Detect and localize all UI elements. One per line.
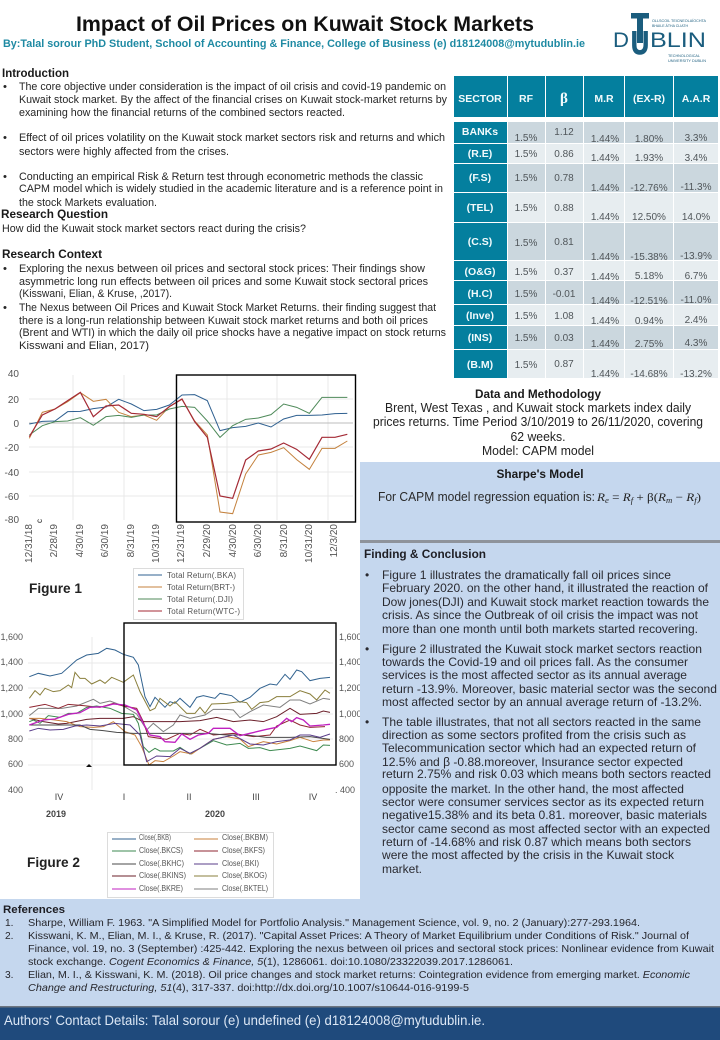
chart: figure 2 line chart: 1,200 <box>0 683 23 693</box>
legend: figure 2: Close(.BKHC) <box>139 859 184 868</box>
findings bullet 3: return 2.75% and risk 0.03 which means both sectors reacted <box>382 767 711 781</box>
panel: data and methodology: 62 weeks. <box>510 430 566 444</box>
legend: figure 2: Close(.BKINS) <box>139 871 186 880</box>
table header: RF <box>519 93 534 105</box>
row: real estate: 1.5% <box>515 149 538 160</box>
panel: introduction: Introduction <box>2 66 69 80</box>
row: health care: 1.44% <box>591 296 619 307</box>
panel: research context: Research Context <box>2 247 102 261</box>
row: real estate: 3.4% <box>685 153 708 164</box>
findings bullet 2: most affected sector by an annual average return of -13.2%. <box>382 695 702 709</box>
row: oil and gas: 5.18% <box>635 271 663 282</box>
panel: introduction: examining how the financial returns of the combined sectors reacted. <box>19 107 345 119</box>
chart: figure 2 line chart: 400 <box>8 785 23 795</box>
chart: figure 1 line chart: c <box>35 519 44 523</box>
row: basic materials: (B.M) <box>467 359 493 371</box>
row: consumer services: 0.81 <box>554 237 574 248</box>
chart: figure 1 line chart: 12/31/18 <box>24 524 35 563</box>
panel: references: stock exchange. Cogent Economics & Finance, 5 (1), 1286061. doi:10.1080/23322039.2017.1286061. <box>28 957 513 968</box>
panel: introduction: The core objective under consideration is the impact of oil crisis and covid-19 pandemic on <box>19 81 446 93</box>
findings bullet 3: Telecommunication sector which had an expected return of <box>382 741 697 755</box>
row: consumer services: -13.9% <box>680 251 712 262</box>
row: consumer services: 1.44% <box>591 252 619 263</box>
row: telecom <box>467 202 710 223</box>
chart: figure 2 line chart: IV <box>309 792 317 802</box>
panel: data and methodology <box>373 387 703 458</box>
chart: figure 1 line chart: 10/31/20 <box>304 524 315 563</box>
panel: introduction: sectors were highly affected from the crises. <box>19 146 229 158</box>
row: telecom: 1.44% <box>591 212 619 223</box>
row: health care: -0.01 <box>553 289 576 300</box>
row: oil and gas: (O&G) <box>465 266 495 278</box>
panel: references: Finance, vol. 19, no. 3 (September) :425-442. Exploring the nexus between oil prices and sectoral stock prices: Nonlinear evidence from Kuwait <box>28 944 714 955</box>
legend: figure 2: Close(.BKCS) <box>139 846 183 855</box>
row: insurance <box>468 332 708 350</box>
row: real estate: 1.93% <box>635 153 663 164</box>
panel: research question <box>1 207 306 235</box>
row: investment: 1.08 <box>554 311 574 322</box>
panel: Sharpe's model: R <box>622 490 631 504</box>
panel: introduction <box>2 66 447 209</box>
panel: research question: Research Question <box>1 207 108 221</box>
title: Impact of Oil Prices on Kuwait Stock Markets <box>76 13 534 36</box>
row: investment: 1.5% <box>515 311 538 322</box>
panel: references: Kisswani, K. M., Elian, M. I., & Kruse, R. (2017). "Capital Asset Prices: A Theory of Market Equilibrium under Conditions of Risk." Journal of <box>28 931 689 942</box>
findings bullet 3 <box>365 715 711 876</box>
legend: figure 2: Close(.BKB) <box>139 833 171 842</box>
row: real estate: 1.44% <box>591 153 619 164</box>
panel: research context: asymmetric long run effects between oil prices and some Kuwait stock sectoral prices <box>19 276 428 288</box>
row: oil and gas <box>465 266 708 283</box>
row: investment: (Inve) <box>466 310 494 322</box>
findings bullet 1: • <box>365 568 369 582</box>
row: insurance: 4.3% <box>685 338 708 349</box>
legend: figure 2: Close(.BKRE) <box>139 884 183 893</box>
icon: TU Dublin logo: BLIN <box>650 29 706 52</box>
legend: figure 1 <box>134 568 244 620</box>
panel: research context: • <box>3 263 7 275</box>
footer: contact details <box>0 1006 720 1040</box>
panel: references: Elian, M. I., & Kisswani, K. M. (2018). Oil price changes and stock market returns: Cointegration evidence from emerging market. Economic <box>28 970 690 981</box>
row: telecom: 12.50% <box>632 212 666 223</box>
findings bullet 3: • <box>365 715 369 729</box>
panel: introduction: CAPM model which is widely studied in the academic literature and is a reference point in <box>19 183 443 195</box>
chart: figure 1 line chart: 40 <box>8 369 19 380</box>
panel: Sharpe's model: R <box>685 490 695 504</box>
row: investment: 1.44% <box>591 316 619 327</box>
panel: research context: Exploring the nexus between oil prices and sectoral stock prices: Their findings show <box>19 263 426 275</box>
panel: research context: (Brent and WTI) in which the daily oil price shocks have a negative impact on stock returns <box>19 327 446 339</box>
chart: figure 2 line chart: 1,000 <box>339 709 362 719</box>
panel: research context: The Nexus between Oil Prices and Kuwait Stock Market Returns. their finding suggest that <box>19 302 437 314</box>
row: basic materials: 1.5% <box>515 360 538 371</box>
row: financial services <box>469 172 712 194</box>
findings bullet 2: towards the Covid-19 and oil prices fall. As the consumer <box>382 655 688 669</box>
icon: TU Dublin logo: OLLSCOIL TEICNEOLAÍOCHTA <box>652 19 707 23</box>
row: banks <box>462 126 708 145</box>
chart: figure 2 line chart: 1,400 <box>339 657 362 667</box>
table: sector results <box>454 76 718 380</box>
findings bullet 2: • <box>365 642 369 656</box>
legend: figure 2: Close(.BKTEL) <box>222 884 268 893</box>
row: basic materials <box>467 359 712 380</box>
row: financial services: 1.5% <box>515 173 538 184</box>
chart: figure 1 line chart: 6/30/19 <box>100 524 111 557</box>
row: oil and gas: 6.7% <box>685 271 708 282</box>
panel: finding and conclusion: Finding & Conclusion <box>364 547 486 561</box>
panel: references: References <box>3 904 65 916</box>
findings bullet 1 <box>365 568 709 636</box>
panel: introduction: Kuwait stock market. By the affect of the financial crises on Kuwait stock-market returns by <box>19 94 447 106</box>
row: banks: 3.3% <box>685 133 708 144</box>
panel: Sharpe's model: R <box>596 490 606 504</box>
footer: contact details: Authors' Contact Details: Talal sorour (e) undefined (e) d18124008@mytudublin.ie. <box>4 1012 485 1028</box>
findings bullet 3: market. <box>382 862 422 876</box>
findings bullet 1: February 2020. on the other hand, it illustrated the reaction of <box>382 581 709 595</box>
row: banks: 1.44% <box>591 134 619 145</box>
label: figure 2: Figure 2 <box>27 854 80 870</box>
panel: introduction: Conducting an empirical Risk & Return test through econometric methods the classic <box>19 171 423 183</box>
panel: references: 1. <box>5 918 14 929</box>
panel: Sharpe's model: f <box>694 496 699 505</box>
panel: findings background <box>360 543 720 900</box>
chart: figure 2 line chart: 1,600 <box>0 632 23 642</box>
chart: figure 2 line chart: III <box>252 792 260 802</box>
row: banks: 1.80% <box>635 134 663 145</box>
row: investment: 2.4% <box>685 315 708 326</box>
findings bullet 2: Figure 2 illustrated the Kuwait stock market sectors reaction <box>382 642 702 656</box>
panel: Sharpe's model <box>360 462 720 543</box>
chart: figure 1 line chart: 6/30/20 <box>253 524 264 557</box>
row: insurance: 2.75% <box>635 339 663 350</box>
panel: references: 3. <box>5 970 14 981</box>
findings bullet 3: return of -14.68% and risk 0.87 which means both sectors <box>382 835 691 849</box>
row: consumer services <box>468 236 712 263</box>
chart: figure 2 line chart: 1,600 <box>339 632 362 642</box>
panel: finding and conclusion <box>364 547 717 876</box>
chart: figure 1 line chart: 12/31/19 <box>176 524 187 563</box>
row: real estate: 0.86 <box>554 149 574 160</box>
row: real estate: (R.E) <box>468 148 492 160</box>
legend: figure 2 <box>108 832 274 898</box>
row: insurance: 0.03 <box>554 333 574 344</box>
row: banks: 1.12 <box>554 127 574 138</box>
chart: figure 1 line chart: 20 <box>8 395 19 406</box>
panel: Sharpe's model: = <box>609 490 623 504</box>
panel: references: Change and Restructuring, 51 (4), 317-337. doi:http://dx.doi.org/10.1007/s10644-016-9199-5 <box>28 983 469 994</box>
panel: research context: there is a long-run relationship between Kuwait stock market returns and both oil prices <box>19 315 428 327</box>
chart: figure 1 line chart: 8/31/20 <box>279 524 290 557</box>
row backgrounds <box>454 122 718 378</box>
row: financial services: -11.3% <box>681 182 712 193</box>
row: consumer services: 1.5% <box>515 238 538 249</box>
findings bullet 3: sector came second as most affected sector with an expected <box>382 822 710 836</box>
row: basic materials: -14.68% <box>630 369 668 380</box>
chart: figure 1 line chart: -40 <box>5 468 19 479</box>
chart: figure 2 line chart <box>0 623 362 819</box>
chart: figure 2 line chart: I <box>123 792 125 802</box>
table header: M.R <box>594 93 614 105</box>
row: consumer services: -15.38% <box>630 252 668 263</box>
legend: figure 1: Total Return(WTC-) <box>167 607 240 616</box>
findings bullet 1: Figure 1 illustrates the dramatically fall oil prices since <box>382 568 671 582</box>
row: insurance: (INS) <box>468 332 492 344</box>
chart: figure 1 line chart <box>5 369 356 563</box>
icon: TU Dublin logo: U <box>631 25 649 61</box>
chart: figure 1 line chart: -60 <box>5 492 19 503</box>
row: telecom: 0.88 <box>554 203 574 214</box>
panel: introduction: • <box>3 132 7 144</box>
table header: (EX-R) <box>633 93 665 105</box>
row: health care <box>467 288 712 307</box>
findings bullet 1: more than one month until both markets started recovering. <box>382 622 698 636</box>
chart: figure 1 line chart: 8/31/19 <box>126 524 137 557</box>
icon: TU Dublin logo: TECHNOLOGICAL <box>668 54 700 58</box>
panel: introduction: • <box>3 81 7 93</box>
panel: data and methodology: Data and Methodology <box>475 387 601 401</box>
label: figure 1: Figure 1 <box>29 580 82 596</box>
chart: figure 1 line chart: 4/30/20 <box>228 524 239 557</box>
chart: figure 2 line chart: 800 <box>8 734 23 744</box>
row: financial services: -12.76% <box>630 183 668 194</box>
chart: figure 1 line chart: -80 <box>5 515 19 526</box>
panel: research context: Kisswani and Elian, 2017) <box>19 340 149 352</box>
row: insurance: 1.44% <box>591 339 619 350</box>
icon: TU Dublin logo: BHAILE ÁTHA CLIATH <box>652 24 688 28</box>
row: financial services: (F.S) <box>469 172 491 184</box>
chart: figure 1 line chart: 0 <box>13 419 19 430</box>
findings bullet 3: negative15.38% and its beta 0.81. moreover, basic materials <box>382 808 707 822</box>
chart: figure 2 line chart: 1,000 <box>0 709 23 719</box>
row: oil and gas: 1.44% <box>591 272 619 283</box>
row: telecom: 1.5% <box>515 203 538 214</box>
chart: figure 2 line chart: 600 <box>339 759 354 769</box>
table header: β <box>560 91 568 107</box>
panel: references: 2. <box>5 931 14 942</box>
author byline: By:Talal sorour PhD Student, School of Accounting & Finance, College of Business (e) d18124008@mytudublin.ie <box>3 38 585 50</box>
panel: research context <box>2 247 446 352</box>
row: financial services: 0.78 <box>554 173 574 184</box>
panel: Sharpe's model: f <box>631 496 635 505</box>
panel: research context: (Kisswani, Elian, & Kruse, ,2017). <box>19 288 172 300</box>
row: health care: 1.5% <box>515 289 538 300</box>
findings bullet 2: services is the most affected sector as its annual average <box>382 668 687 682</box>
findings bullet 3: opposite the market. In the other hand, the most affected <box>382 782 684 796</box>
panel: data and methodology: Model: CAPM model <box>482 444 594 458</box>
panel: Sharpe's model: − <box>672 490 686 504</box>
panel: data and methodology: Brent, West Texas , and Kuwait stock markets index daily <box>385 401 692 415</box>
findings bullet 1: Dow jones(DJI) and Kuwait stock market reaction towards the <box>382 595 709 609</box>
table header: SECTOR <box>458 93 502 105</box>
panel: introduction: • <box>3 171 7 183</box>
chart: figure 2 line chart: II <box>186 792 192 802</box>
row: telecom: 14.0% <box>682 212 710 223</box>
panel: introduction: the stock Markets evaluation. <box>19 197 157 209</box>
chart: figure 2 line chart: 2019 <box>46 809 66 819</box>
panel: data and methodology: prices returns. Time Period 3/10/2019 to 26/11/2020, covering <box>373 415 703 429</box>
chart: figure 2 line chart: 1,400 <box>0 657 23 667</box>
chart: figure 2 line chart: 2020 <box>205 809 225 819</box>
panel: Sharpe's model: ) <box>697 490 701 504</box>
findings bullet 2 <box>365 642 717 709</box>
legend: figure 2: Close(.BKBM) <box>222 833 268 842</box>
row: oil and gas: 0.37 <box>554 267 574 278</box>
panel: research context: • <box>3 302 7 314</box>
row: insurance: 1.5% <box>515 333 538 344</box>
chart: figure 2 line chart: IV <box>55 792 63 802</box>
chart: figure 2 line chart: 1,200 <box>339 683 362 693</box>
icon: TU Dublin logo <box>613 13 707 63</box>
chart: figure 2 line chart: . 400 <box>335 785 355 795</box>
chart: figure 2 line chart: 800 <box>339 734 354 744</box>
panel: research question: How did the Kuwait stock market sectors react during the crisis? <box>2 223 306 235</box>
legend: figure 2: Close(.BKOG) <box>222 871 267 880</box>
legend: figure 1: Total Return(BRT-) <box>167 583 235 592</box>
row: health care: -12.51% <box>630 296 668 307</box>
icon: TU Dublin logo: D <box>613 29 629 52</box>
findings bullet 3: sector were consumer services sector as its expected return <box>382 795 704 809</box>
row: real estate <box>468 148 708 164</box>
row: consumer services: (C.S) <box>468 236 492 248</box>
legend: figure 2: Close(.BKI) <box>222 859 259 868</box>
findings bullet 3: direction as some sectors profited from the crisis such as <box>382 728 686 742</box>
findings bullet 1: crisis. As since the Outbreak of oil crisis the impact was not <box>382 608 699 622</box>
findings bullet 3: were the most affected by the crisis in the Kuwait stock <box>381 848 675 862</box>
panel: references: Sharpe, William F. 1963. "A Simplified Model for Portfolio Analysis." Management Science, vol. 9, no. 2 (January):277-293.1964. <box>28 918 640 929</box>
panel: references <box>3 904 714 994</box>
panel: Sharpe's model: e <box>605 496 609 505</box>
findings bullet 3: The table illustrates, that not all sectors reacted in the same <box>382 715 701 729</box>
panel: Sharpe's model: m <box>666 496 673 505</box>
row: banks: BANKs <box>462 126 498 138</box>
row: investment <box>466 310 708 327</box>
panel: references background <box>0 899 720 1007</box>
panel: Sharpe's model: R <box>657 490 667 504</box>
chart: figure 1 line chart: 4/30/19 <box>75 524 86 557</box>
legend: figure 1: Total Return(.BKA) <box>167 571 236 580</box>
legend: figure 2: Close(.BKFS) <box>222 846 265 855</box>
row: basic materials: 1.44% <box>591 369 619 380</box>
panel: introduction: Effect of oil prices volatility on the Kuwait stock market sectors risk and returns and which <box>19 132 445 144</box>
findings bullet 3: 12.5% and β -0.88.moreover, Insurance sector expected <box>382 755 683 769</box>
row: health care: (H.C) <box>467 288 493 300</box>
chart: figure 1 line chart: 2/29/20 <box>202 524 213 557</box>
chart: figure 1 line chart: -20 <box>5 443 19 454</box>
chart: figure 1 line chart: 10/31/19 <box>151 524 162 563</box>
row: health care: -11.0% <box>681 295 712 306</box>
chart: figure 1 line chart: 2/28/19 <box>49 524 60 557</box>
panel: Sharpe's model: Sharpe's Model <box>496 467 584 481</box>
chart: figure 2 line chart: 600 <box>8 759 23 769</box>
panel: Sharpe's model: For CAPM model regression equation is: <box>378 490 595 504</box>
table header <box>454 76 718 117</box>
row: oil and gas: 1.5% <box>515 267 538 278</box>
chart: figure 1 line chart: 12/3/20 <box>329 524 340 557</box>
row: telecom: (TEL) <box>467 202 493 214</box>
row: financial services: 1.44% <box>591 183 619 194</box>
findings bullet 2: return -13.9%. Moreover, basic material sector was the second <box>382 682 717 696</box>
legend: figure 1: Total Return(.DJI) <box>167 595 233 604</box>
row: basic materials: 0.87 <box>554 359 574 370</box>
row: investment: 0.94% <box>635 316 663 327</box>
icon: TU Dublin logo: UNIVERSITY DUBLIN <box>668 59 706 63</box>
panel: Sharpe's model: + β( <box>633 490 658 504</box>
table header: A.A.R <box>682 93 711 105</box>
row: basic materials: -13.2% <box>680 369 712 380</box>
row: banks: 1.5% <box>515 133 538 144</box>
